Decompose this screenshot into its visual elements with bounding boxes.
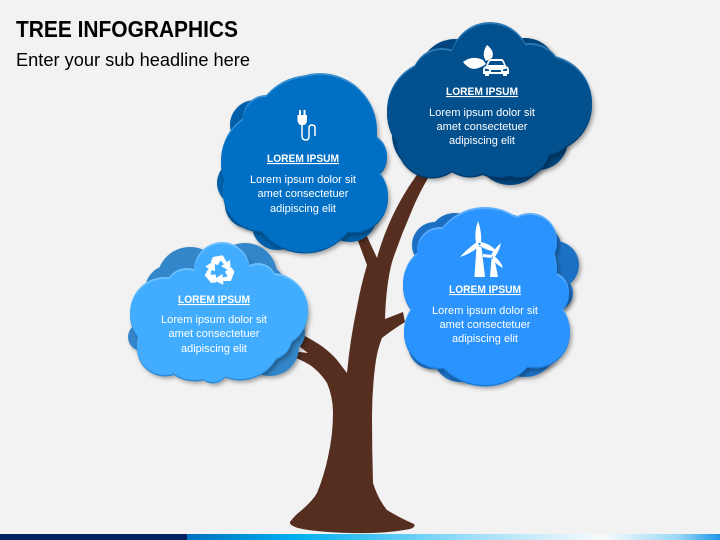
heading: LOREM IPSUM	[449, 284, 521, 296]
body text: Lorem ipsum dolor sit	[161, 314, 267, 326]
body text	[432, 305, 538, 345]
body text	[429, 107, 535, 147]
body text: Lorem ipsum dolor sit	[250, 174, 356, 186]
icon: recycle	[202, 256, 236, 287]
icon: electric plug	[298, 110, 315, 140]
body text: adipiscing elit	[449, 135, 515, 147]
icon: car with leaves	[463, 45, 509, 76]
heading: LOREM IPSUM	[446, 86, 518, 98]
body text: amet consectetuer	[258, 188, 349, 200]
footer colour bar	[0, 534, 720, 540]
heading: LOREM IPSUM	[178, 294, 250, 306]
cloud shape: bright blue	[403, 207, 579, 386]
body text	[250, 174, 356, 215]
body text	[161, 314, 267, 355]
cloud shape: mid blue	[217, 73, 388, 254]
cloud shape: dark blue	[387, 22, 592, 185]
panel: dark blue cloud	[387, 22, 592, 185]
body text: amet consectetuer	[436, 121, 528, 133]
body text: Lorem ipsum dolor sit	[432, 305, 538, 317]
subtitle: Enter your sub headline here	[16, 50, 250, 70]
cloud shape: light blue	[128, 242, 308, 384]
body text: adipiscing elit	[270, 203, 336, 215]
tree trunk and branches	[288, 168, 432, 533]
title: TREE INFOGRAPHICS	[16, 16, 238, 42]
panel: bright blue cloud	[403, 207, 579, 386]
panel: mid blue cloud	[217, 73, 388, 254]
body text: Lorem ipsum dolor sit	[429, 107, 535, 119]
panel: light blue cloud	[128, 242, 308, 384]
body text: adipiscing elit	[181, 343, 247, 355]
heading: LOREM IPSUM	[267, 153, 339, 165]
body text: adipiscing elit	[452, 333, 518, 345]
body text: amet consectetuer	[168, 328, 260, 340]
icon: wind turbines	[460, 221, 503, 277]
body text: amet consectetuer	[440, 319, 531, 331]
